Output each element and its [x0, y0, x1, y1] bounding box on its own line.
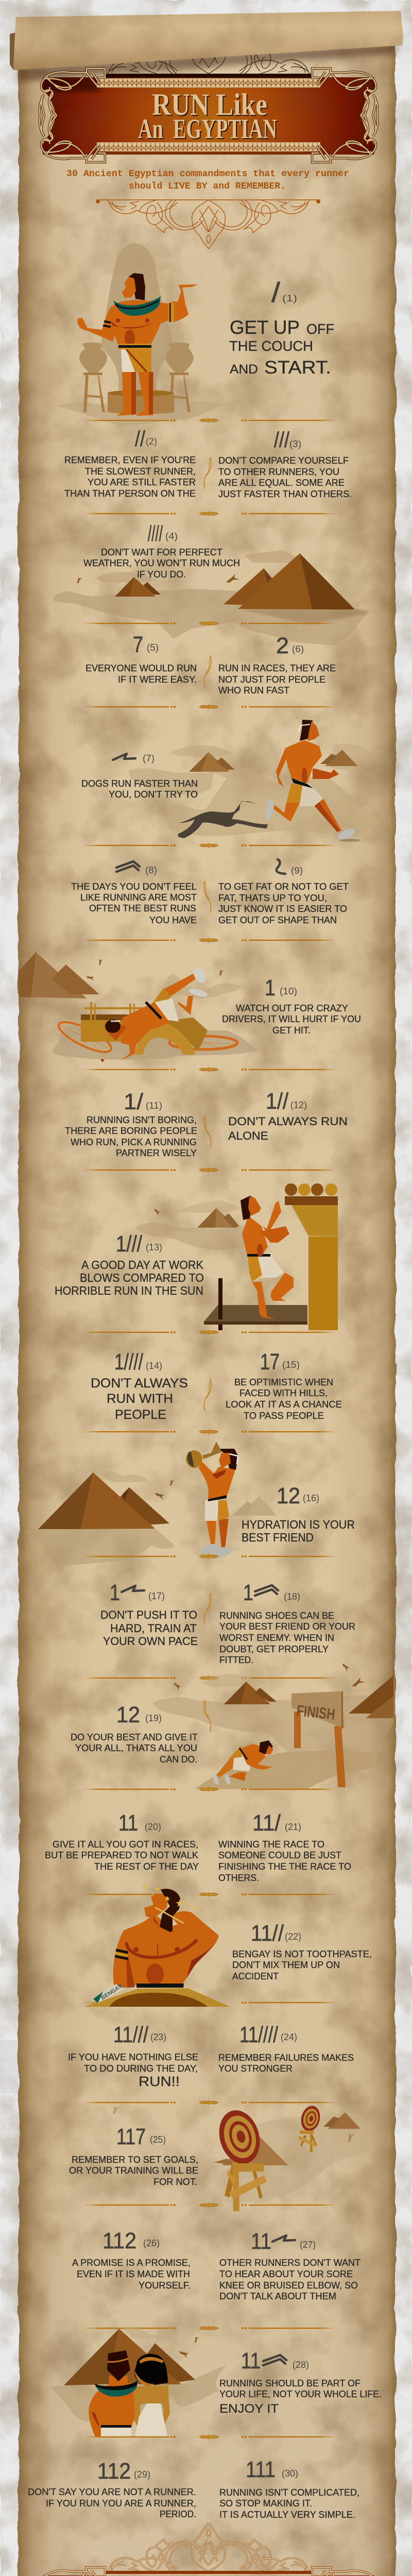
commandment 2: THE SLOWEST RUNNER,: [85, 466, 196, 477]
commandment 1: THE COUCH: [229, 338, 313, 354]
large target: [213, 2106, 267, 2211]
commandment 3: DON'T COMPARE YOURSELF: [218, 455, 349, 466]
commandment 14: [91, 1349, 188, 1422]
runner: [264, 720, 357, 842]
pharaoh figure: [77, 273, 198, 416]
commandment 27: (27): [300, 2240, 316, 2250]
commandment 22: 11//: [251, 1921, 284, 1946]
commandment 12: DON'T ALWAYS RUN: [228, 1115, 348, 1128]
illustration: man with column and treadmill: [135, 1183, 338, 1330]
drinking man: [186, 1442, 238, 1560]
commandment 22: (22): [285, 1931, 301, 1942]
commandment 3: JUST FASTER THAN OTHERS.: [218, 489, 352, 499]
title text: An EGYPTIAN: [138, 113, 277, 144]
commandment 13: BLOWS COMPARED TO: [80, 1271, 204, 1284]
panel: closing banner: [40, 2567, 377, 2576]
title text: [138, 88, 277, 144]
commandment 23: 11///: [113, 2022, 149, 2047]
commandment 28: (28): [293, 2360, 309, 2370]
illustration: runner and dog: [129, 720, 377, 842]
commandment 8: THE DAYS YOU DON'T FEEL: [71, 882, 197, 892]
commandment 21: [218, 1810, 351, 1883]
commandment 24: 11////: [239, 2022, 279, 2047]
commandment 9: JUST KNOW IT IS EASIER TO: [218, 904, 347, 914]
commandment 27: DON'T TALK ABOUT THEM: [219, 2291, 336, 2301]
commandment 25: 117: [116, 2124, 146, 2149]
stars: ★: [164, 1895, 170, 1903]
commandment 26: 112: [102, 2228, 136, 2253]
commandment 7: (7): [143, 753, 154, 764]
commandment 25: (25): [150, 2134, 166, 2145]
commandment 7: DOGS RUN FASTER THAN: [81, 778, 198, 789]
commandment 6: [218, 633, 336, 696]
commandment 4: DON'T WAIT FOR PERFECT: [101, 547, 222, 557]
commandment 20: 11: [118, 1810, 138, 1836]
stars: ★: [187, 1903, 192, 1908]
commandment 26: (26): [143, 2238, 160, 2248]
commandment 4: WEATHER, YOU WON'T RUN MUCH: [83, 558, 240, 568]
commandment 4: ////: [148, 521, 163, 546]
illustration: pharaoh with vases: [57, 243, 222, 427]
commandment 28: [219, 2348, 382, 2416]
commandment 3: TO OTHER RUNNERS, YOU: [218, 467, 339, 477]
commandment 1: AND: [230, 362, 258, 377]
commandment 21: OTHERS.: [218, 1873, 259, 1883]
commandment 5: EVERYONE WOULD RUN: [85, 663, 197, 673]
roll end cap: [10, 32, 15, 70]
commandment 28: YOUR LIFE, NOT YOUR WHOLE LIFE.: [219, 2389, 382, 2399]
commandment 18: YOUR BEST FRIEND OR YOUR: [219, 1621, 355, 1632]
commandment 22: BENGAY IS NOT TOOTHPASTE,: [232, 1949, 372, 1959]
commandment 13: A GOOD DAY AT WORK: [81, 1258, 204, 1272]
commandment 17: YOUR OWN PACE: [103, 1635, 198, 1648]
illustration: targets: [110, 2104, 381, 2211]
commandment 18: (18): [284, 1591, 300, 1602]
commandment 18: DOUBT, GET PROPERLY: [219, 1644, 329, 1654]
commandment 14: DON'T ALWAYS: [91, 1376, 188, 1391]
commandment 5: [85, 632, 197, 685]
stars: ★: [194, 1904, 200, 1912]
commandment 20: (20): [145, 1822, 161, 1832]
commandment 22: ACCIDENT: [232, 1971, 279, 1981]
commandment 7: YOU, DON'T TRY TO: [109, 789, 198, 800]
commandment 25: REMEMBER TO SET GOALS,: [72, 2155, 198, 2165]
commandment 23: RUN!!: [139, 2074, 180, 2089]
commandment 2: [64, 427, 196, 499]
commandment 5: IF IT WERE EASY.: [118, 674, 197, 685]
commandment 1: GET UP: [230, 317, 300, 338]
vases and stools: [79, 343, 194, 412]
commandment 27: TO HEAR ABOUT YOUR SORE: [219, 2269, 353, 2279]
stars: ★: [175, 1897, 184, 1909]
commandment 21: WINNING THE RACE TO: [218, 1839, 324, 1850]
commandment 23: TO DO DURING THE DAY,: [84, 2063, 198, 2074]
commandment 14: (14): [146, 1361, 162, 1371]
commandment 24: [218, 2022, 354, 2074]
commandment 18: 1: [243, 1580, 253, 1605]
commandment 1: START.: [264, 358, 331, 378]
commandment 14: RUN WITH: [107, 1392, 173, 1406]
commandment 22: [232, 1921, 372, 1981]
commandment 27: 11: [251, 2229, 271, 2254]
commandment 1: (1): [282, 293, 297, 303]
commandment 12: 1//: [266, 1089, 289, 1114]
commandment 3: ///: [274, 428, 289, 452]
commandment 11: WHO RUN, PICK A RUNNING: [71, 1137, 197, 1147]
commandment 20: THE REST OF THE DAY: [94, 1861, 199, 1872]
commandment 29: 112: [97, 2459, 131, 2484]
commandment 16: BEST FRIEND: [242, 1531, 314, 1544]
illustration: finish line: [152, 1662, 393, 1789]
commandment 26: A PROMISE IS A PROMISE,: [72, 2258, 191, 2268]
finish sign: [291, 1691, 346, 1787]
commandment 25: [69, 2124, 198, 2187]
commandment 5: (5): [147, 642, 159, 653]
commandment 10: 1: [265, 975, 276, 1001]
commandment 27: KNEE OR BRUISED ELBOW, SO: [219, 2280, 358, 2291]
commandment 19: YOUR ALL, THATS ALL YOU: [75, 1743, 197, 1753]
commandment 26: [72, 2228, 191, 2291]
commandment 9: (9): [291, 866, 303, 876]
subtitle: [66, 169, 349, 192]
small target: [298, 2104, 322, 2152]
commandment 18: [219, 1580, 355, 1665]
illustration: hydration: [24, 1442, 277, 1565]
commandment 16: [242, 1483, 355, 1544]
title text: RUN Like: [152, 88, 267, 122]
commandment 17: [100, 1580, 198, 1648]
commandment 2: THAN THAT PERSON ON THE: [64, 488, 196, 499]
commandment 12: [228, 1089, 348, 1142]
commandment 12: ALONE: [228, 1129, 268, 1142]
illustration: pyramids: [54, 550, 371, 646]
commandment 30: [219, 2457, 359, 2520]
commandment 28: ENJOY IT: [219, 2402, 279, 2416]
commandment 19: [71, 1702, 198, 1765]
commandment 29: (29): [134, 2469, 150, 2480]
commandment 30: 111: [246, 2457, 276, 2482]
ornament: under subtitle: [96, 199, 320, 249]
commandment 8: [71, 861, 197, 925]
commandment 15: (15): [282, 1360, 300, 1370]
commandment 30: (30): [282, 2468, 298, 2479]
commandment 9: TO GET FAT OR NOT TO GET: [218, 882, 349, 892]
commandment 6: 2: [276, 633, 289, 658]
stars: ★: [186, 1899, 191, 1904]
commandment 8: LIKE RUNNING ARE MOST: [80, 892, 197, 903]
commandment 17: (17): [148, 1591, 165, 1601]
commandment 2: REMEMBER, EVEN IF YOU'RE: [64, 455, 196, 465]
commandment 30: SO STOP MAKING IT.: [219, 2498, 312, 2509]
commandment 15: TO PASS PEOPLE: [244, 1411, 324, 1421]
commandment 20: GIVE IT ALL YOU GOT IN RACES,: [53, 1839, 198, 1850]
commandment 10: [222, 975, 361, 1036]
commandment 11: (11): [146, 1100, 162, 1111]
commandment 11: PARTNER WISELY: [116, 1148, 197, 1158]
mound with tube: [84, 1983, 230, 2007]
commandment 22: DON'T MIX THEM UP ON: [232, 1960, 340, 1970]
woman: [131, 2354, 170, 2437]
commandment 26: EVEN IF IT IS MADE WITH: [77, 2269, 190, 2279]
commandment 2: (2): [146, 436, 157, 447]
commandment 24: YOU STRONGER: [218, 2063, 293, 2074]
stars: [141, 1883, 200, 1912]
commandment 18: RUNNING SHOES CAN BE: [219, 1611, 334, 1621]
dog: [178, 801, 268, 838]
subtitle: 30 Ancient Egyptian commandments that every runner: [66, 169, 349, 179]
stars: ★: [151, 1891, 155, 1895]
commandment 25: OR YOUR TRAINING WILL BE: [69, 2165, 198, 2176]
commandment 8: (8): [145, 865, 157, 875]
stars: ★: [154, 1885, 160, 1893]
panel: title banner: [40, 69, 377, 162]
commandment 21: (21): [285, 1822, 301, 1832]
commandment 13: [55, 1231, 204, 1297]
finish sign: FINISH: [296, 1702, 336, 1723]
commandment 6: NOT JUST FOR PEOPLE: [218, 674, 325, 685]
commandment 28: 11: [241, 2348, 261, 2374]
commandment 16: 12: [277, 1483, 300, 1509]
commandment 4: (4): [165, 531, 178, 541]
commandment 15: BE OPTIMISTIC WHEN: [234, 1377, 333, 1387]
commandment 28: RUNNING SHOULD BE PART OF: [219, 2378, 360, 2388]
chariot: [55, 1002, 237, 1058]
commandment 13: HORRIBLE RUN IN THE SUN: [55, 1284, 203, 1297]
commandment 20: BUT BE PREPARED TO NOT WALK: [45, 1850, 198, 1860]
crashed runner: [100, 965, 209, 1062]
commandment 11: 1/: [124, 1089, 144, 1114]
commandment 9: GET OUT OF SHAPE THAN: [218, 915, 337, 925]
illustration: couple and pyramids: [49, 2327, 227, 2437]
commandment 30: IT IS ACTUALLY VERY SIMPLE.: [219, 2510, 355, 2520]
commandment 4: IF YOU DO.: [137, 569, 186, 580]
commandment 6: WHO RUN FAST: [218, 685, 289, 696]
commandment 11: THERE ARE BORING PEOPLE: [65, 1126, 197, 1136]
commandment 1: /: [271, 277, 280, 308]
commandment 27: [219, 2229, 360, 2301]
commandment 23: IF YOU HAVE NOTHING ELSE: [68, 2052, 198, 2062]
commandment 26: YOURSELF.: [139, 2280, 191, 2291]
commandment 25: FOR NOT.: [153, 2177, 197, 2187]
commandment 6: RUN IN RACES, THEY ARE: [218, 663, 336, 673]
commandment 16: (16): [303, 1493, 319, 1503]
mound with tube: BENGAY: [100, 1983, 124, 2002]
commandment 7: [81, 753, 198, 800]
stars: ★: [141, 1883, 148, 1892]
commandment 2: //: [135, 427, 145, 451]
commandment 14: 1////: [114, 1349, 144, 1375]
commandment 10: WATCH OUT FOR CRAZY: [236, 1003, 348, 1013]
illustration: bengay man: [84, 1883, 230, 2007]
commandment 19: DO YOUR BEST AND GIVE IT: [71, 1732, 198, 1742]
ornament: above closing banner: [108, 2523, 310, 2572]
roll shadow: [19, 43, 396, 81]
commandment 24: REMEMBER FAILURES MAKES: [218, 2053, 354, 2063]
illustration: chariot crash: [19, 952, 258, 1062]
commandment 18: FITTED.: [219, 1655, 253, 1665]
subtitle: should LIVE BY and REMEMBER.: [129, 181, 286, 192]
commandment 18: WORST ENEMY. WHEN IN: [219, 1633, 334, 1643]
commandment 9: [218, 859, 349, 925]
commandment 6: (6): [292, 644, 304, 654]
commandment 2: YOU ARE STILL FASTER: [88, 477, 196, 487]
commandment 14: PEOPLE: [115, 1408, 166, 1422]
commandment 11: RUNNING ISN'T BORING,: [87, 1115, 197, 1125]
commandment 21: FINISHING THE THE RACE TO: [218, 1861, 351, 1872]
column and urns: [285, 1183, 338, 1330]
commandment 30: RUNNING ISN'T COMPLICATED,: [219, 2487, 359, 2498]
commandment 15: LOOK AT IT AS A CHANCE: [226, 1399, 342, 1410]
commandment 9: FAT, THATS UP TO YOU,: [218, 893, 327, 903]
commandment 3: (3): [289, 439, 301, 449]
commandment 19: CAN DO.: [160, 1754, 197, 1765]
commandment 8: YOU HAVE: [149, 915, 197, 925]
man: [89, 2350, 138, 2437]
commandment 29: DON'T SAY YOU ARE NOT A RUNNER.: [28, 2487, 196, 2497]
commandment 1: OFF: [306, 321, 334, 337]
commandment 8: OFTEN THE BEST RUNS: [89, 903, 196, 913]
commandment 10: DRIVERS, IT WILL HURT IF YOU: [222, 1014, 361, 1024]
commandment 15: [226, 1349, 342, 1421]
commandment 29: [28, 2459, 196, 2519]
commandment 10: GET HIT.: [272, 1025, 311, 1036]
commandment 17: HARD, TRAIN AT: [110, 1622, 197, 1635]
crawling man: [212, 1740, 273, 1786]
treadmill platform: [204, 1278, 307, 1330]
commandment 3: ARE ALL EQUAL. SOME ARE: [218, 478, 345, 488]
commandment 20: [45, 1810, 199, 1872]
commandment 16: HYDRATION IS YOUR: [242, 1518, 355, 1531]
commandment 13: (13): [146, 1242, 162, 1252]
commandment 15: FACED WITH HILLS,: [239, 1388, 328, 1398]
commandment 12: (12): [290, 1100, 307, 1110]
commandment 29: IF YOU RUN YOU ARE A RUNNER,: [46, 2498, 196, 2509]
commandment 17: 1: [110, 1580, 120, 1605]
panel: top scroll roll: [10, 8, 406, 72]
commandment 24: (24): [281, 2032, 297, 2042]
ornament: behind top banner: [108, 25, 310, 74]
man on treadmill: [241, 1196, 294, 1319]
commandment 23: [68, 2022, 198, 2089]
commandment 3: [218, 428, 352, 499]
commandment 11: [65, 1089, 197, 1158]
commandment 21: SOMEONE COULD BE JUST: [218, 1850, 341, 1860]
commandment 19: 12: [116, 1702, 140, 1727]
commandment 19: (19): [145, 1713, 162, 1723]
commandment 29: PERIOD.: [160, 2509, 196, 2519]
commandment 10: (10): [280, 986, 297, 996]
commandment 1: [229, 277, 334, 378]
commandment 27: OTHER RUNNERS DON'T WANT: [219, 2258, 360, 2268]
commandment 4: [83, 521, 240, 580]
commandment 17: DON'T PUSH IT TO: [100, 1608, 197, 1621]
commandment 15: 17: [260, 1349, 280, 1375]
commandment 5: 7: [133, 632, 143, 657]
commandment 21: 11/: [252, 1810, 281, 1836]
commandment 23: (23): [150, 2032, 166, 2042]
commandment 13: 1///: [116, 1231, 143, 1257]
